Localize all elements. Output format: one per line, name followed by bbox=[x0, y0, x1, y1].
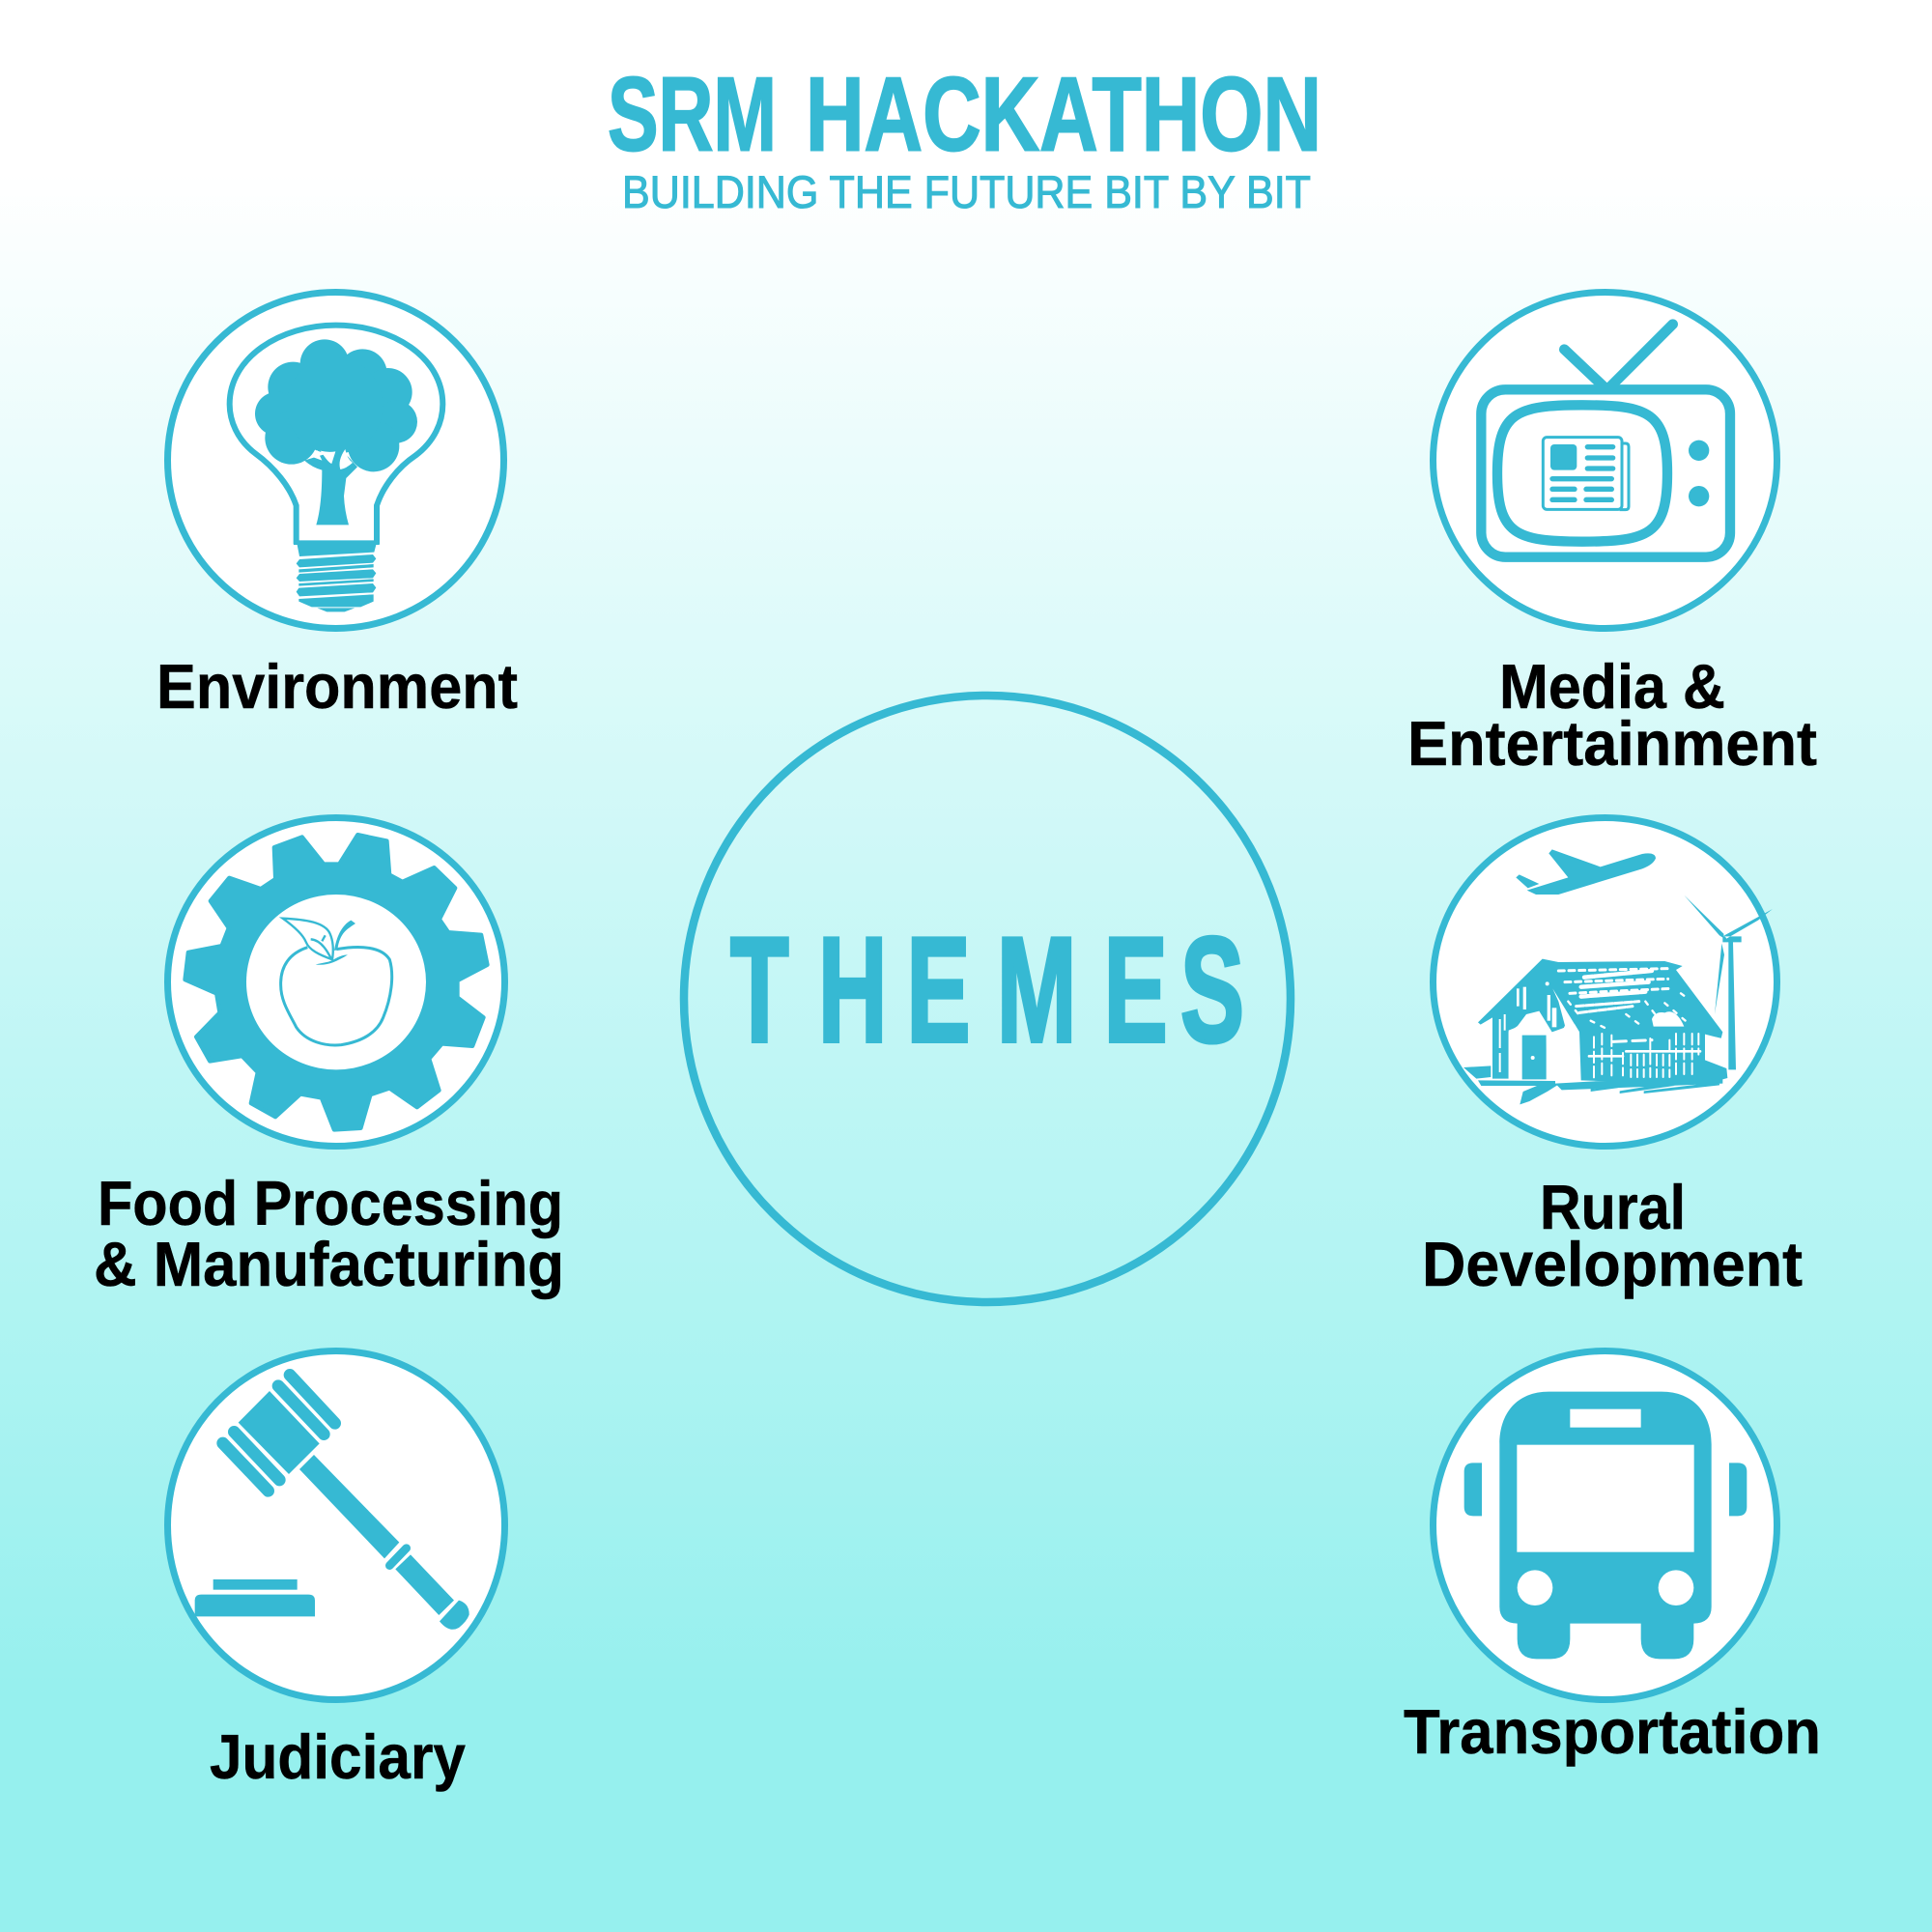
icon: gavel bbox=[195, 1375, 469, 1630]
icon: plane, house and wind turbine bbox=[1463, 849, 1773, 1104]
panel: rural development bbox=[1422, 817, 1803, 1299]
label: media and entertainment bbox=[1407, 651, 1817, 779]
panel: environment bbox=[156, 292, 518, 722]
panel: transportation bbox=[1404, 1350, 1821, 1767]
icon: house bbox=[1463, 959, 1727, 1104]
subtitle: BUILDING THE FUTURE BIT BY BIT bbox=[622, 166, 1311, 217]
label: rural development: Development bbox=[1422, 1229, 1803, 1299]
center circle: themes bbox=[684, 696, 1291, 1302]
title bbox=[608, 56, 1321, 174]
label: environment: Environment bbox=[156, 651, 518, 722]
icon: gear with apple bbox=[185, 835, 487, 1129]
panel: judiciary bbox=[168, 1350, 504, 1792]
icon: newspaper bbox=[1543, 438, 1629, 510]
icon: apple bbox=[281, 919, 392, 1045]
icon: wind turbine bbox=[1684, 895, 1773, 1069]
label: food processing and manufacturing bbox=[94, 1168, 564, 1299]
title: SRM bbox=[608, 56, 777, 174]
roof speckles bbox=[1558, 969, 1700, 1079]
label: transportation: Transportation bbox=[1404, 1696, 1821, 1767]
panel: food processing and manufacturing bbox=[94, 817, 564, 1299]
label: food processing and manufacturing: Food Processing bbox=[98, 1168, 563, 1238]
heading: themes: THEMES bbox=[730, 905, 1244, 1073]
label: judiciary: Judiciary bbox=[210, 1721, 466, 1792]
label: media and entertainment: Entertainment bbox=[1407, 708, 1817, 779]
label: media and entertainment: Media & bbox=[1499, 651, 1725, 722]
icon: plane bbox=[1516, 849, 1656, 895]
icon: bus bbox=[1464, 1392, 1747, 1659]
icon: television with newspaper bbox=[1481, 325, 1730, 557]
label: food processing and manufacturing: & Manufacturing bbox=[94, 1229, 564, 1299]
title: HACKATHON bbox=[806, 56, 1321, 174]
label: rural development: Rural bbox=[1540, 1172, 1686, 1242]
label: rural development bbox=[1422, 1172, 1803, 1299]
panel: media and entertainment bbox=[1407, 292, 1817, 779]
icon: light bulb with tree bbox=[230, 326, 442, 611]
